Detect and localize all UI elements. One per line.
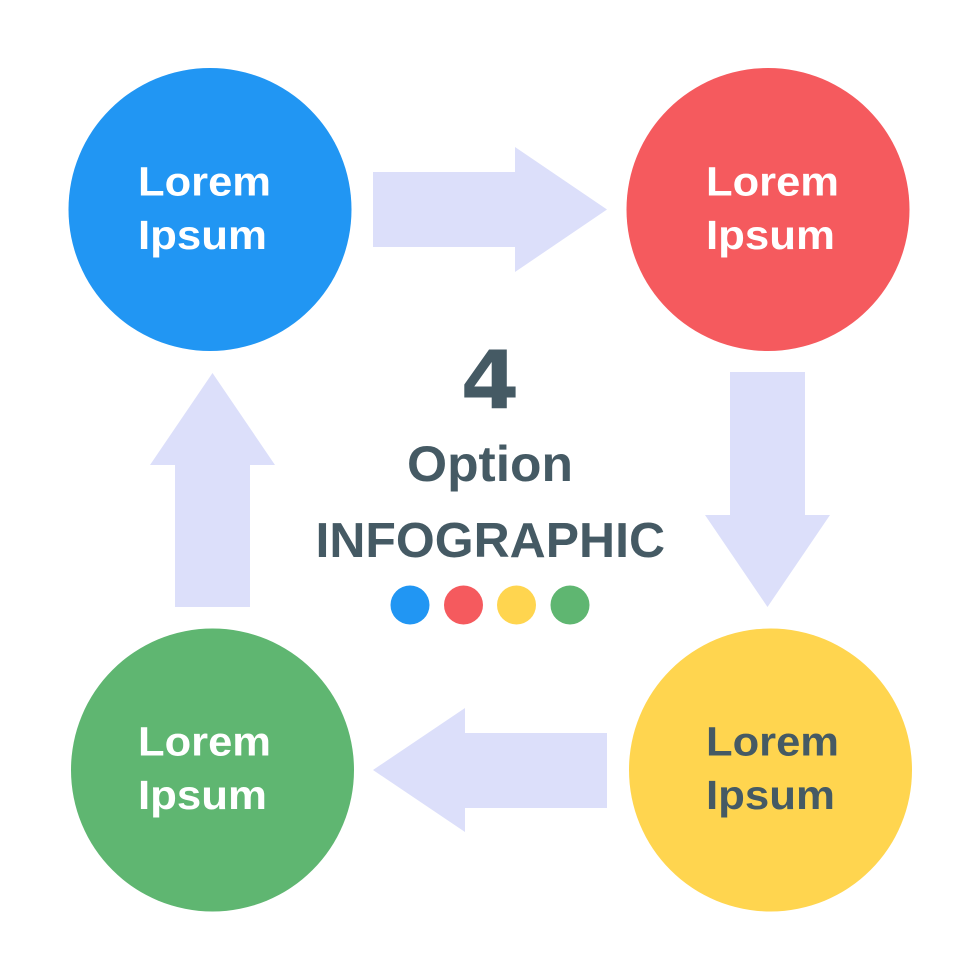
arrow: green to blue (150, 373, 275, 607)
arrow: red to yellow (705, 372, 830, 607)
arrow: yellow to green (373, 708, 607, 832)
panel: yellow circle: Ipsum (706, 772, 835, 818)
panel: green circle: Lorem (138, 718, 271, 764)
heading: number 4: 4 (460, 334, 520, 427)
panel: red circle: Lorem (706, 158, 839, 204)
panel: green circle (71, 628, 354, 912)
panel: blue circle (68, 68, 352, 351)
panel: red circle (626, 68, 910, 351)
panel: yellow circle (629, 628, 912, 912)
panel: green circle: Ipsum (138, 772, 267, 818)
heading: INFOGRAPHIC: INFOGRAPHIC (316, 514, 665, 568)
panel: yellow circle: Lorem (706, 718, 839, 764)
panel: blue circle: Lorem (138, 158, 271, 204)
heading: Option: Option (407, 436, 573, 492)
legend dots (390, 586, 590, 624)
arrow: blue to red (373, 147, 607, 272)
panel: blue circle: Ipsum (138, 212, 267, 258)
panel: red circle: Ipsum (706, 212, 835, 258)
